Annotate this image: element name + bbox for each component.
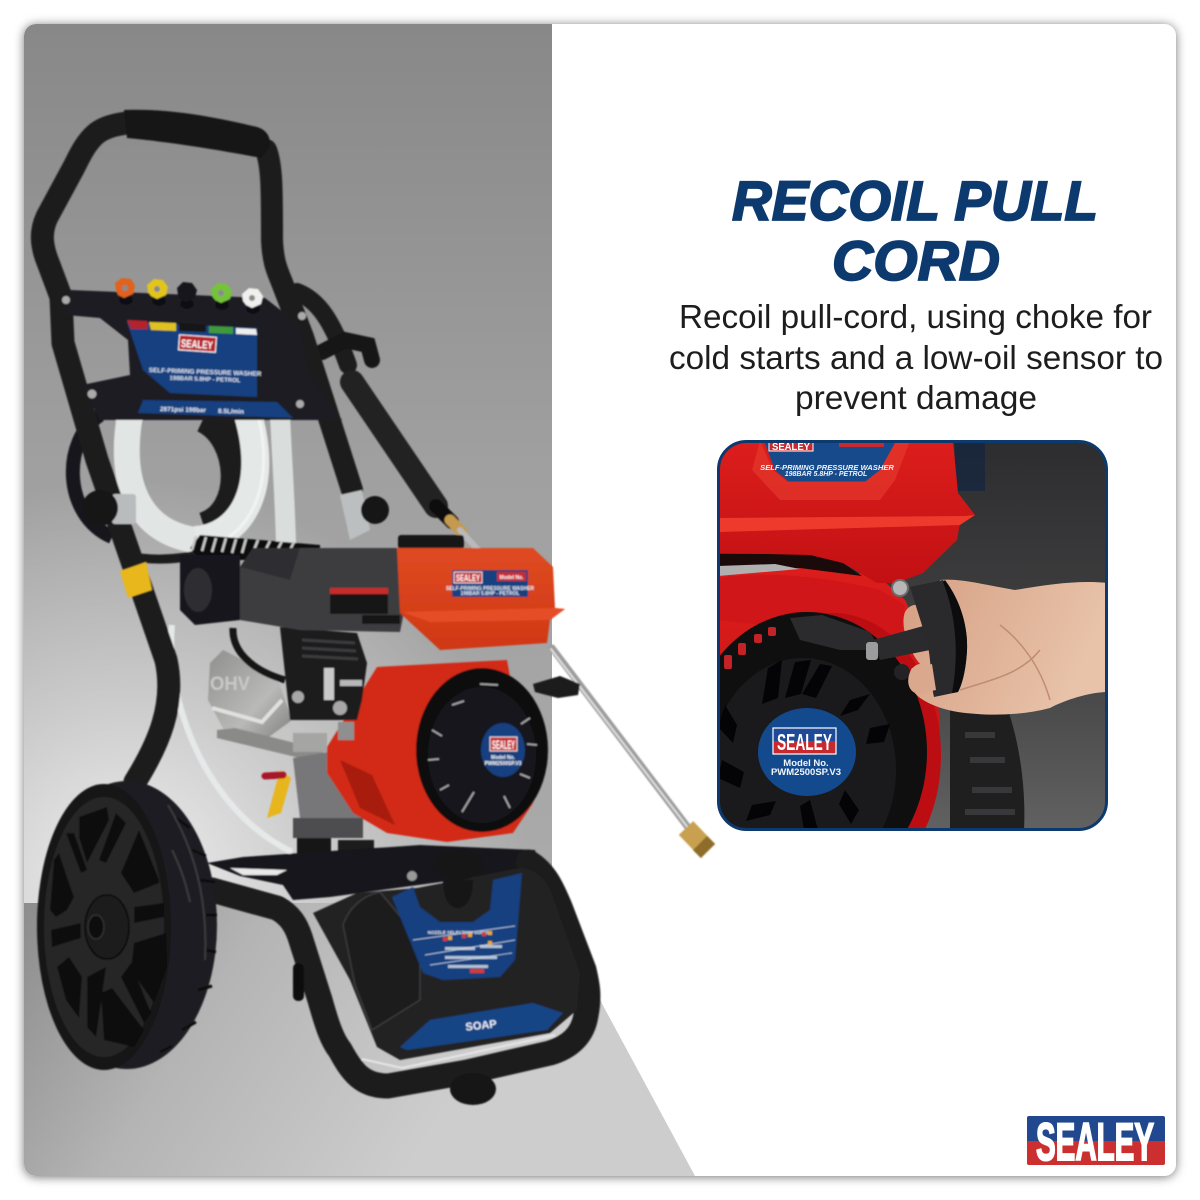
inset wheel xyxy=(950,710,1024,830)
wheel frame and deck xyxy=(207,845,588,1086)
inset fuel tank: SELF-PRIMING PRESSURE WASHER xyxy=(760,463,894,472)
panel logo: SEALEY xyxy=(180,338,214,352)
description text: Recoil pull-cord, using choke for xyxy=(679,298,1152,335)
air filter box xyxy=(240,548,403,632)
warning sticker on frame xyxy=(120,562,152,598)
wheel xyxy=(37,781,217,1070)
inset pull handle xyxy=(866,580,967,697)
nozzle guide chart on tank: NOZZLE SELECTION GUIDE xyxy=(428,930,488,935)
inset background xyxy=(718,441,1107,830)
inset fuel tank xyxy=(720,441,975,583)
inset fuel tank: 198BAR 5.8HP - PETROL xyxy=(785,471,867,478)
nozzle guide chart on tank xyxy=(413,926,515,973)
inset recoil housing xyxy=(720,612,941,828)
folding frame clamps xyxy=(82,490,389,540)
engine silver block xyxy=(208,628,374,864)
engine silver block: OHV xyxy=(210,674,250,695)
soap label: SOAP xyxy=(465,1018,497,1034)
tank label: SELF-PRIMING PRESSURE WASHER xyxy=(446,586,534,592)
engine cylinder xyxy=(280,627,367,740)
engine red crankcase xyxy=(327,660,533,842)
control panel with nozzles xyxy=(62,278,342,420)
inset fuel tank: SEALEY xyxy=(772,442,810,453)
pressure washer product illustration xyxy=(37,110,708,1105)
padded handle grip xyxy=(124,110,270,158)
control panel with nozzles: 8.5L/min xyxy=(218,408,244,416)
inset finger over handle xyxy=(908,664,936,694)
tank label xyxy=(446,570,534,597)
fuel valve xyxy=(265,770,291,818)
inset engine body xyxy=(720,568,940,735)
recoil starter: PWM2500SP.V3 xyxy=(485,761,522,767)
title: RECOIL PULL xyxy=(732,169,1098,232)
description text: cold starts and a low-oil sensor to xyxy=(669,339,1163,376)
inset blue model badge xyxy=(758,708,856,796)
black fuel cap xyxy=(398,535,464,549)
Sealey logo xyxy=(1027,1116,1165,1165)
inset border xyxy=(718,442,1106,830)
control panel with nozzles: 198BAR 5.8HP - PETROL xyxy=(169,376,241,384)
hoses xyxy=(73,415,292,852)
starter logo: SEALEY xyxy=(492,738,515,752)
nozzle colours xyxy=(115,278,263,314)
inset hand xyxy=(903,580,1108,715)
recoil starter xyxy=(416,668,580,832)
description text xyxy=(669,298,1163,416)
tank label: Model No. xyxy=(500,575,524,581)
inset linkage xyxy=(718,554,862,576)
inset blue model badge: Model No. xyxy=(783,758,829,769)
title xyxy=(732,169,1098,292)
wheel spoke openings xyxy=(50,807,167,1047)
title: CORD xyxy=(832,229,1000,292)
inset photo: recoil pull cord close-up xyxy=(720,443,1105,828)
tank label: 198BAR 5.8HP - PETROL xyxy=(460,591,520,597)
recoil starter: Model No. xyxy=(491,755,516,761)
panel: grey photo backdrop xyxy=(24,24,695,1176)
black tubular frame xyxy=(42,110,352,782)
panel logo xyxy=(178,335,216,352)
spray gun and lance xyxy=(297,292,708,851)
inset blue model badge: PWM2500SP.V3 xyxy=(771,767,841,778)
starter logo xyxy=(490,737,517,752)
panel specs: 2871psi 198bar xyxy=(160,406,206,414)
description text: prevent damage xyxy=(795,379,1037,416)
soap tank xyxy=(313,850,580,1105)
rear pump housing xyxy=(180,535,320,625)
panel product text: SELF-PRIMING PRESSURE WASHER xyxy=(149,367,262,378)
fuel tank xyxy=(397,548,565,650)
badge logo: SEALEY xyxy=(777,729,832,755)
tank label: SEALEY xyxy=(456,573,480,583)
